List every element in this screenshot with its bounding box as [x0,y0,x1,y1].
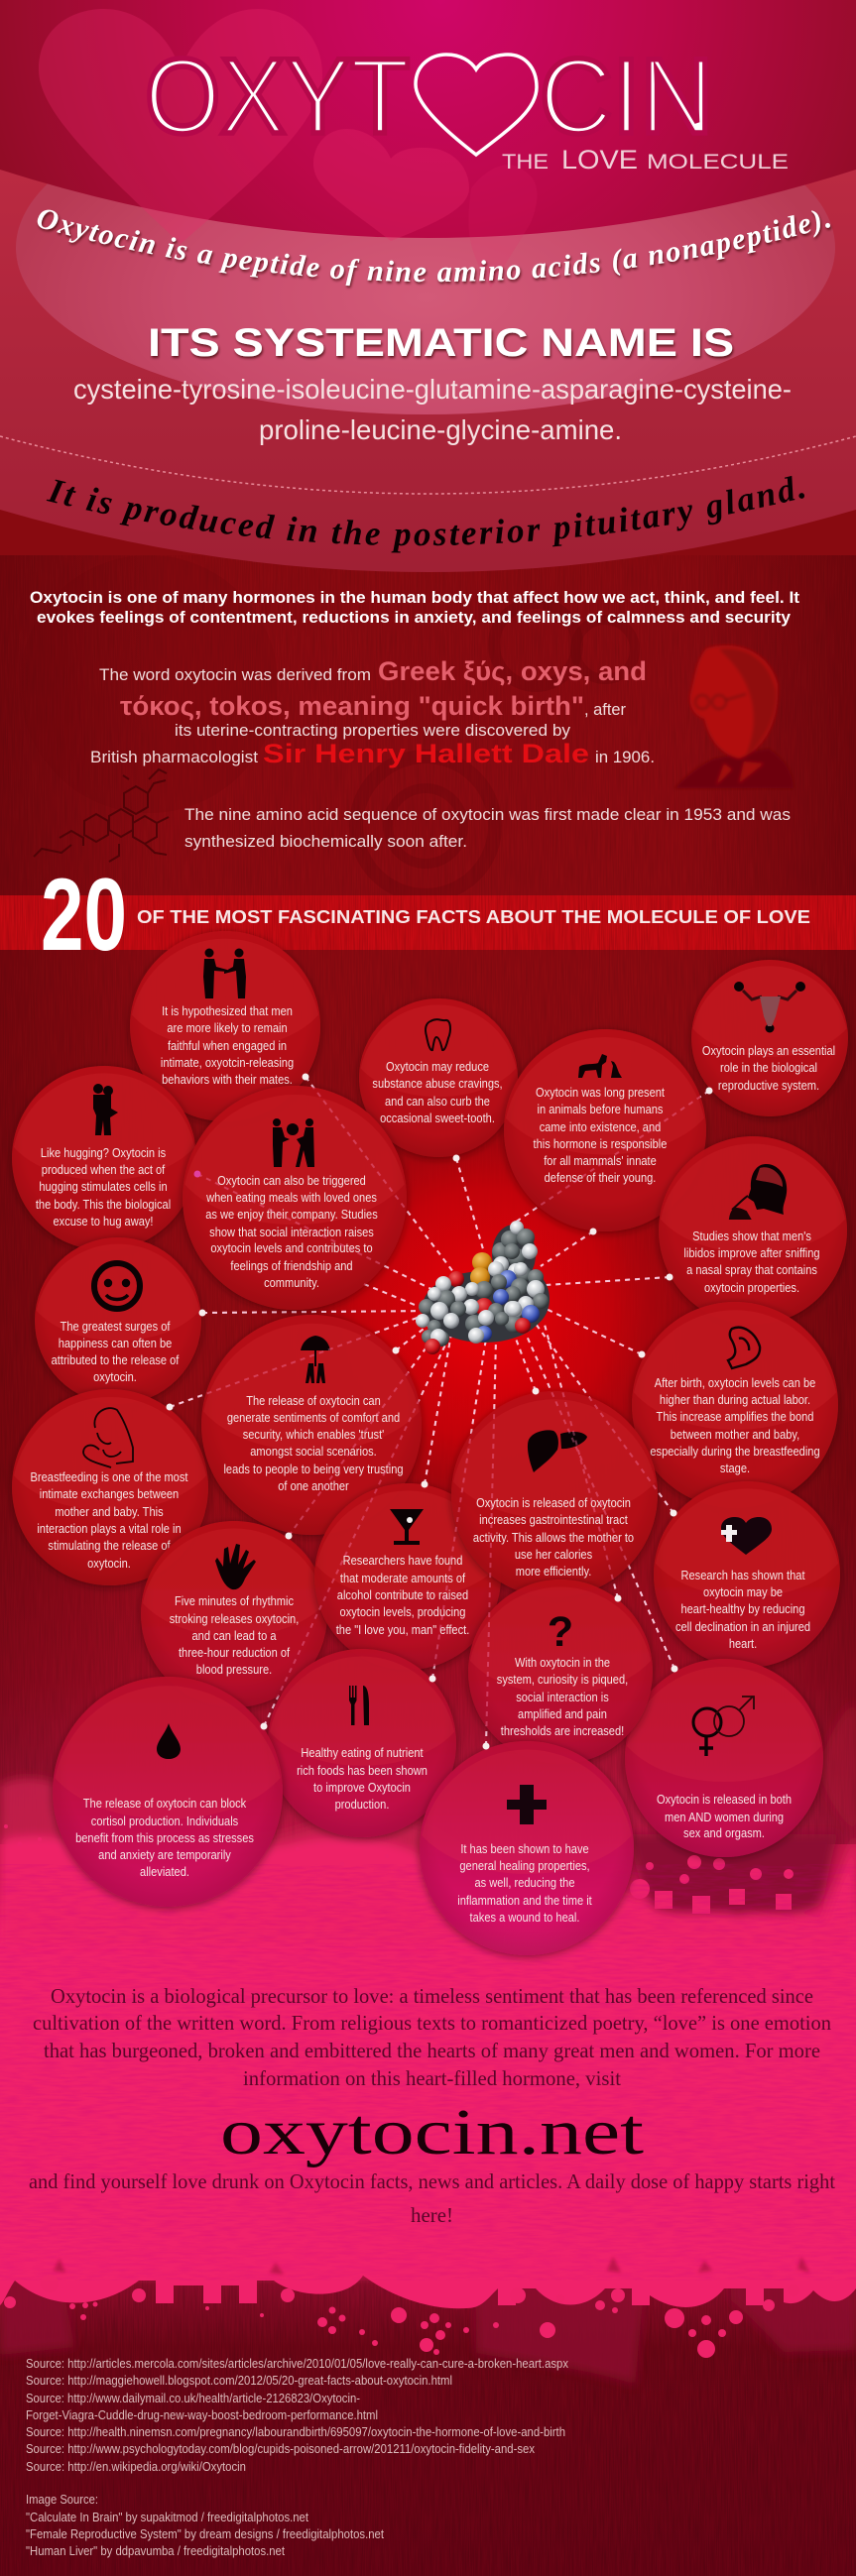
fact 14: healing [420,1741,634,1955]
text: takes a wound to heal. [470,1910,579,1925]
website link text: oxytocin.net [220,2096,644,2168]
text: heart. [729,1636,757,1651]
header top arc [0,0,856,238]
text: After birth, oxytocin levels can be [655,1375,816,1390]
fact 1: fidelity [130,931,320,1121]
decorative hearts [39,9,538,288]
text: security, which enables 'trust' [243,1427,384,1442]
image sources list: Image Source: [26,2492,98,2507]
text: amino acid sequence: synthesized biochemically soon after. [184,833,467,851]
systematic name: proline-leucine-glycine-amine. [259,414,622,445]
text: heart-healthy by reducing [680,1601,805,1616]
text: especially during the breastfeeding [650,1444,820,1459]
text [683,1229,820,1295]
text: came into existence, and [540,1119,661,1134]
text: Researchers have found [343,1553,462,1568]
text: the "I love you, man" effect. [336,1622,469,1637]
closing line: here! [411,2203,453,2227]
text: and can lead to a [191,1628,277,1643]
icon: drop [157,1723,181,1759]
text: leads to people to being very trusting [223,1462,404,1476]
text: amino acid sequence [184,806,791,851]
curved statement: nonapeptide: Oxytocin is a peptide of nine amino acids (a nonapeptide). [37,210,833,290]
text: increases gastrointestinal tract [479,1512,628,1527]
text: between mother and baby, [671,1427,799,1442]
sources list: Source: http://www.dailymail.co.uk/health/article-2126823/Oxytocin- [26,2391,360,2405]
subtitle: the love molecule [502,145,789,175]
text: The greatest surges of [61,1319,171,1334]
text: a nasal spray that contains [686,1262,817,1277]
text [534,1085,668,1185]
text: This increase amplifies the bond [657,1409,813,1424]
text: as we enjoy their company. Studies [205,1207,378,1222]
fact 19: breastfeeding [12,1389,208,1585]
image sources list: "Calculate In Brain" by supakitmod / freedigitalphotos.net [26,2510,308,2524]
etymology paragraph: Sir Henry Hallett Dale [263,739,589,768]
text: that moderate amounts of [340,1571,466,1585]
molecule glow [238,1066,734,1562]
etymology paragraph [90,656,655,768]
image sources list: "Female Reproductive System" by dream designs / freedigitalphotos.net [26,2526,384,2541]
intro paragraph: Oxytocin is one of many hormones in the human body that affect how we act, think, and feel. It [30,588,799,607]
text: libidos improve after sniffing [683,1245,820,1260]
text: reproductive system. [718,1078,819,1093]
text: sex and orgasm. [683,1825,765,1840]
closing line [29,2169,835,2227]
text: show that social interaction raises [209,1225,374,1239]
text: amplified and pain [518,1706,607,1721]
text: inflammation and the time it [457,1893,592,1908]
sources list: Source: http://www.psychologytoday.com/blog/cupids-poisoned-arrow/201211/oxytocin-fidelity-and-sex [26,2441,535,2456]
sources list: Source: http://articles.mercola.com/sites/articles/archive/2010/01/05/love-really-can-cure-a-broken-heart.aspx [26,2356,568,2371]
text [170,1593,299,1677]
systematic name [73,374,792,445]
text [702,1043,835,1093]
faint background rings [20,555,635,895]
text [297,1745,428,1812]
closing paragraph: Oxytocin is a biological precursor to love: a timeless sentiment that has been referenced since [51,1984,813,2008]
text [31,1469,188,1571]
fact 6: animals [504,1029,706,1231]
closing paragraph [33,1984,831,2090]
fact 2: hugging [12,1066,196,1250]
closing line: and find yourself love drunk on Oxytocin facts, news and articles. A daily dose of happy starts right [29,2169,835,2193]
fact 4: happiness [35,1237,201,1404]
etymology paragraph: British pharmacologist [90,749,258,766]
text: stimulating the release of [48,1538,171,1553]
text: the body. This the biological [36,1197,171,1212]
subtitle: the love molecule: LOVE [561,145,638,175]
icon: martini glass [390,1509,424,1545]
text: community. [264,1275,319,1290]
fact 12: curiosity [468,1580,653,1764]
text: Healthy eating of nutrient [301,1745,424,1760]
text: Studies show that men's [692,1229,811,1243]
text: activity. This allows the mother to [473,1530,634,1545]
text: interaction plays a vital role in [37,1521,182,1536]
icon: embracing couple [93,1084,118,1135]
systematic name: cysteine-tyrosine-isoleucine-glutamine-asparagine-cysteine- [73,374,792,405]
text: Research has shown that [680,1568,805,1582]
text: production. [335,1797,389,1812]
fact 10: digestion [451,1391,658,1597]
text: Oxytocin plays an essential [702,1043,835,1058]
icon: couple holding hands [203,948,246,998]
fact 9: after birth [632,1302,838,1508]
text: oxytocin properties. [704,1280,799,1295]
curved statement: pituitary gland: It is produced in the posterior pituitary gland. [46,476,804,553]
text: With oxytocin in the [515,1655,610,1670]
text: Oxytocin is released of oxytocin [476,1495,631,1510]
text: blood pressure. [196,1662,272,1677]
text: and anxiety are temporarily [98,1847,231,1862]
banner: 20 facts heading: OF THE MOST FASCINATING FACTS ABOUT THE MOLECULE OF LOVE [137,907,810,927]
connector lines under the circles [170,1077,709,1746]
etymology paragraph: τόκος, tokos, meaning "quick birth" [120,691,584,721]
connector lines showing through the circles [170,1077,709,1746]
fact 7: reproductive system [691,960,848,1116]
text: It is hypothesized that men [162,1003,293,1018]
text: as well, reducing the [474,1875,575,1890]
chemical structure sketch [34,769,169,862]
icon: uterus [734,982,805,1033]
text: and can also curb the [385,1094,490,1109]
text: Oxytocin was long present [536,1085,666,1100]
sources list [26,2356,568,2474]
title: OXYTOCIN [145,36,713,156]
icon: liver [528,1430,587,1472]
text: thresholds are increased! [501,1723,624,1738]
etymology paragraph: its uterine-contracting properties were discovered by [175,722,571,740]
text: The release of oxytocin can block [83,1796,246,1811]
etymology paragraph: The word oxytocin was derived from [99,666,371,684]
icon: question mark: ? [548,1608,573,1656]
text [650,1375,820,1475]
text: alleviated. [140,1864,189,1879]
text: system, curiosity is piqued, [497,1672,628,1687]
text: oxytocin may be [703,1584,783,1599]
text [223,1393,404,1493]
text: happiness can often be [59,1336,173,1350]
text: Five minutes of rhythmic [175,1593,294,1608]
closing paragraph: cultivation of the written word. From religious texts to romanticized poetry, “love” is one emotion [33,2011,831,2035]
fact 13: male and female [625,1659,823,1857]
text: stroking releases oxytocin, [170,1611,299,1626]
text: oxytocin. [87,1556,131,1571]
text: It has been shown to have [460,1841,589,1856]
text: role in the biological [720,1060,817,1075]
text: three-hour reduction of [179,1645,291,1660]
icon: fork and knife [349,1686,369,1725]
header band [0,81,856,572]
fact 11: heart health [654,1481,840,1668]
text: for all mammals' innate [544,1153,657,1168]
text: when eating meals with loved ones [205,1190,377,1205]
fact 3: meals [183,1086,407,1310]
text: excuse to hug away! [53,1214,154,1229]
icon: plus [507,1785,547,1824]
text: defense of their young. [545,1170,656,1185]
text: Oxytocin is released in both [657,1792,792,1807]
text [457,1841,592,1925]
text [205,1173,378,1290]
text: higher than during actual labor. [660,1392,810,1407]
icon: mother and baby outline [728,1328,760,1368]
lower pink transition blotches [0,1701,856,2276]
subtitle: the love molecule: MOLECULE [647,151,789,174]
text: Oxytocin may reduce [386,1059,489,1074]
icon: couple under umbrella [301,1336,330,1383]
text: cortisol production. Individuals [91,1814,238,1828]
icon: head with brain and spray [730,1164,787,1219]
text: general healing properties, [459,1858,590,1873]
text: produced when the act of [42,1162,166,1177]
text: oxytocin levels and contributes to [210,1240,373,1255]
sources list: Source: http://maggiehowell.blogspot.com/2012/05/20-great-facts-about-oxytocin.html [26,2373,452,2388]
intro paragraph: evokes feelings of contentment, reductions in anxiety, and feelings of calmness and security [37,608,792,627]
text: cell declination in an injured [675,1619,810,1634]
text: oxytocin levels, producing [340,1604,465,1619]
text [336,1553,469,1637]
image sources list: "Human Liver" by ddpavumba / freedigitalphotos.net [26,2543,285,2558]
title: OXYTOCIN: CIN [540,36,713,156]
text [497,1655,628,1738]
text: substance abuse cravings, [372,1076,503,1091]
icon: breastfeeding mother outline [83,1408,133,1467]
text: faithful when engaged in [168,1038,287,1053]
fact 8: nasal spray [659,1136,847,1325]
text: mother and baby. This [55,1504,164,1519]
etymology paragraph: in 1906. [595,749,655,766]
fact 18: alcohol [314,1483,501,1670]
text: oxytocin. [93,1369,137,1384]
text: this hormone is responsible [534,1136,668,1151]
text [161,1003,294,1087]
sources list: Source: http://en.wikipedia.org/wiki/Oxytocin [26,2459,246,2474]
etymology paragraph: Greek ξύς, oxys, and [378,656,647,686]
sources list: Source: http://health.ninemsn.com/pregnancy/labourandbirth/695097/oxytocin-the-hormone-of-love-and-birth [26,2424,565,2439]
text [675,1568,810,1651]
icon: couple with plate [273,1118,314,1167]
icon: smiley [94,1263,140,1309]
bottom edge of pink area [0,2236,856,2385]
fact 15: healthy eating [268,1649,456,1837]
text: amino acid sequence: The nine amino acid sequence of oxytocin was first made clear in 1953 and was [184,806,791,824]
connector end dots [167,1073,712,1749]
intro paragraph [30,588,799,627]
closing paragraph: that has burgeoned, broken and embittered the hearts of many great men and women. For more [44,2039,820,2062]
title: OXYTOCIN: OXYT [145,36,410,156]
fact 17: stroking [141,1521,327,1707]
text: behaviors with their mates. [162,1072,293,1087]
icon: heart replacing the O [416,55,537,155]
text: stage. [720,1461,750,1475]
banner: 20 facts heading [0,858,856,973]
text: hugging stimulates cells in [39,1179,168,1194]
text: intimate exchanges between [40,1486,179,1501]
text: alcohol contribute to raised [337,1587,468,1602]
text: of one another [278,1478,349,1493]
text: Oxytocin can also be triggered [217,1173,366,1188]
text: in animals before humans [538,1102,663,1116]
molecule [416,1221,550,1354]
text: feelings of friendship and [230,1258,353,1273]
sources list: Forget-Viagra-Cuddle-drug-new-way-boost-bedroom-performance.html [26,2407,378,2422]
text: men AND women during [665,1810,784,1824]
icon: heart with white cross [721,1517,772,1555]
text [657,1792,792,1840]
text: The release of oxytocin can [246,1393,381,1408]
text: use her calories [515,1547,592,1562]
text [372,1059,503,1125]
text: more efficiently. [516,1564,591,1579]
closing paragraph: information on this heart-filled hormone, visit [243,2066,621,2090]
subtitle: the love molecule: THE [502,151,549,174]
icon: tooth [426,1019,450,1050]
icon: hand [215,1544,256,1589]
text: social interaction is [516,1690,609,1704]
icon: gender symbols [693,1697,754,1756]
text [52,1319,180,1384]
icon: dog and cat [578,1054,622,1078]
etymology paragraph: , after [584,701,627,719]
text: amongst social scenarios. [250,1444,377,1459]
text: Breastfeeding is one of the most [31,1469,188,1484]
portrait: Sir Henry Dale [674,645,794,788]
fact 16: cortisol [53,1677,283,1907]
text [473,1495,634,1579]
fact 20: trust [201,1315,422,1535]
text: Like hugging? Oxytocin is [41,1145,166,1160]
text: are more likely to remain [167,1020,288,1035]
text: attributed to the release of [52,1352,180,1367]
banner: 20 facts heading: 20 [41,858,127,973]
text: occasional sweet-tooth. [380,1111,495,1125]
image sources list [26,2492,384,2558]
text: generate sentiments of comfort and [227,1410,400,1425]
text: benefit from this process as stresses [75,1830,254,1845]
text [36,1145,171,1229]
text: rich foods has been shown [297,1763,428,1778]
text: intimate, oxyotcin-releasing [161,1055,294,1070]
fact 5: tooth [359,998,518,1157]
text [75,1796,254,1879]
heading: its systematic name is: ITS SYSTEMATIC NAME IS [148,321,734,365]
text: to improve Oxytocin [313,1780,411,1795]
